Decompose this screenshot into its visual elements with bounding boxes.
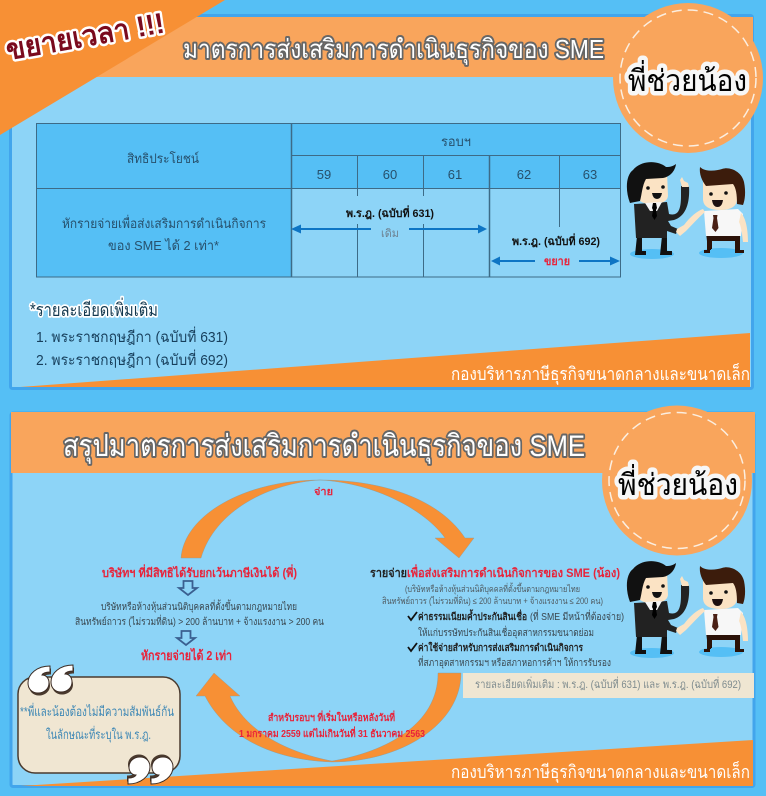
heading: summary title: สรุปมาตรการส่งเสริมการดำเนินธุรกิจของ SME xyxy=(63,430,585,465)
arrow: return arc xyxy=(196,673,461,762)
label: extended: ขยาย xyxy=(544,256,570,268)
badge: top: พี่ช่วยน้อง xyxy=(628,60,747,98)
notes: more details: 1. พระราชกฤษฎีกา (ฉบับที่ 631) xyxy=(36,326,228,346)
callout: relationship note xyxy=(18,665,180,784)
table cell: benefit description xyxy=(62,215,266,253)
notes: more details: *รายละเอียดเพิ่มเติม xyxy=(30,297,158,320)
corner ribbon xyxy=(0,0,225,135)
icon: check two xyxy=(408,643,417,651)
callout: relationship note: **พี่และน้องต้องไม่มีความสัมพันธ์กัน xyxy=(20,703,174,719)
panel: top measures xyxy=(10,16,753,388)
heading: top panel title: มาตรการส่งเสริมการดำเนินธุรกิจของ SME xyxy=(183,34,604,65)
company conditions xyxy=(75,599,324,628)
text block: eligible period: สำหรับรอบฯ ที่เริ่มในหรือหลังวันที่ xyxy=(268,710,395,724)
text block: eligible period xyxy=(239,710,425,740)
table header: years: 59 xyxy=(317,167,331,182)
footer wedge: top xyxy=(20,333,750,387)
timeline label: decree 692: พ.ร.ฎ. (ฉบับที่ 692) xyxy=(512,233,600,248)
table: benefit timeline xyxy=(36,123,620,277)
callout: more details xyxy=(463,673,754,698)
icon: two businessmen top xyxy=(627,162,748,259)
label: pay: จ่าย xyxy=(314,486,333,498)
table cell: benefit description: ของ SME ได้ 2 เท่า* xyxy=(108,238,219,253)
arrow: extended period xyxy=(491,256,620,266)
arrow: down one xyxy=(179,581,197,595)
table cell: benefit description: หักรายจ่ายเพื่อส่งเสริมการดำเนินกิจการ xyxy=(62,215,266,231)
table header: years: 63 xyxy=(583,167,597,182)
text block: SME expenses: ค่าธรรมเนียมค้ำประกันสินเชื่อ xyxy=(418,609,527,623)
icon: opening quote xyxy=(28,665,74,696)
text block: SME expenses: ที่สภาอุตสาหกรรมฯ หรือสภาหอการค้าฯ ให้การรับรอง xyxy=(418,655,611,669)
text block: eligible period: 1 มกราคม 2559 แต่ไม่เกินวันที่ 31 ธันวาคม 2563 xyxy=(239,726,425,740)
footer wedge: summary xyxy=(20,740,753,786)
text block: SME expenses xyxy=(370,564,624,669)
result: double deduction: หักรายจ่ายได้ 2 เท่า xyxy=(141,647,232,663)
company conditions: สินทรัพย์ถาวร (ไม่รวมที่ดิน) > 200 ล้านบาท + จ้างแรงงาน > 200 คน xyxy=(75,614,324,628)
header band: top xyxy=(12,17,753,77)
badge: summary xyxy=(602,406,752,556)
icon: two businessmen summary xyxy=(627,561,748,658)
text block: SME expenses: (บริษัทหรือห้างหุ้นส่วนนิติบุคคลที่ตั้งขึ้นตามกฎหมายไทย xyxy=(405,582,580,595)
text block: SME expenses: รายจ่าย xyxy=(370,566,407,580)
text block: SME expenses: ให้แก่บรรษัทประกันสินเชื่ออุตสาหกรรมขนาดย่อม xyxy=(418,625,594,639)
badge: top xyxy=(613,3,763,153)
notes: more details xyxy=(30,297,228,369)
callout: relationship note: ในลักษณะที่ระบุใน พ.ร.ฎ. xyxy=(46,726,151,743)
table cell: rounds heading: รอบฯ xyxy=(441,134,471,149)
icon: check one xyxy=(408,612,417,620)
company conditions: บริษัทหรือห้างหุ้นส่วนนิติบุคคลที่ตั้งขึ้นตามกฎหมายไทย xyxy=(101,599,297,613)
table header: years: 61 xyxy=(448,167,462,182)
arrow: down two xyxy=(177,631,195,645)
table header: years xyxy=(317,167,597,182)
icon: closing quote xyxy=(127,754,173,784)
notes: more details: 2. พระราชกฤษฎีกา (ฉบับที่ 692) xyxy=(36,349,228,369)
header band: summary xyxy=(11,412,755,473)
arrow: pay arc xyxy=(181,480,474,558)
text block: eligible company xyxy=(75,564,324,663)
text block: eligible company: บริษัทฯ ที่มีสิทธิได้รับยกเว้นภาษีเงินได้ (พี่) xyxy=(102,564,297,580)
text block: SME expenses: เพื่อส่งเสริมการดำเนินกิจการของ SME (น้อง) xyxy=(407,564,620,580)
label: original: เดิม xyxy=(381,228,399,240)
table cell: benefit heading: สิทธิประโยชน์ xyxy=(127,151,199,166)
ribbon label: extended: ขยายเวลา !!! xyxy=(4,8,167,67)
badge: summary: พี่ช่วยน้อง xyxy=(618,464,738,502)
text block: SME expenses: ค่าใช้จ่ายสำหรับการส่งเสริมการดำเนินกิจการ xyxy=(418,641,584,654)
text block: SME expenses: สินทรัพย์ถาวร (ไม่รวมที่ดิน) ≤ 200 ล้านบาท + จ้างแรงงาน ≤ 200 คน) xyxy=(382,594,603,606)
table header: years: 62 xyxy=(517,167,531,182)
table header: years: 60 xyxy=(383,167,397,182)
arrow: original period xyxy=(291,224,487,234)
text block: SME expenses: (ที่ SME มีหน้าที่ต้องจ่าย) xyxy=(530,609,624,623)
panel: summary xyxy=(11,412,755,786)
timeline label: decree 631: พ.ร.ฎ. (ฉบับที่ 631) xyxy=(346,205,434,220)
